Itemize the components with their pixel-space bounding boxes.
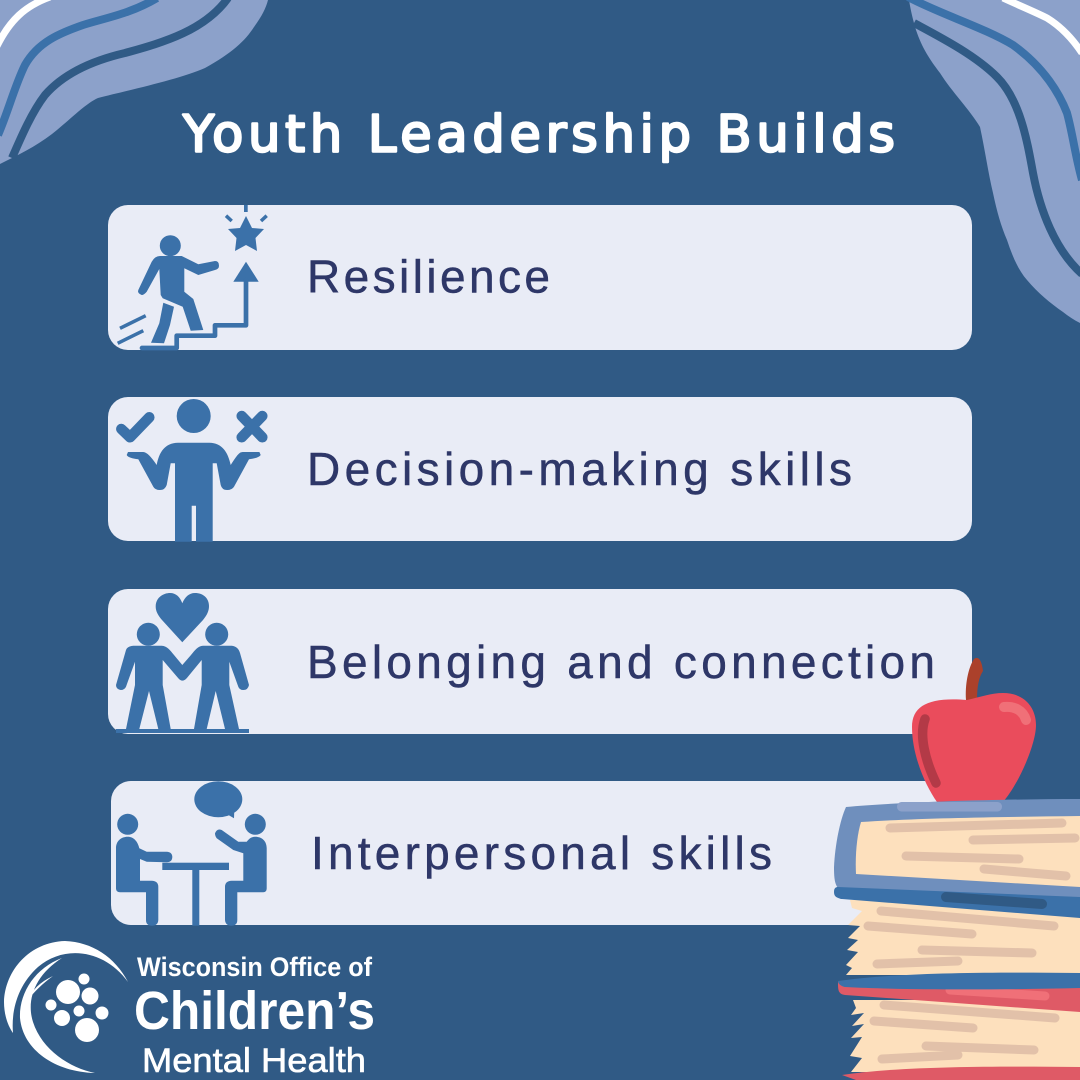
label: belonging and connection: Belonging and connection	[307, 636, 935, 688]
logo text: Mental Health	[142, 1042, 366, 1080]
label: interpersonal skills: Interpersonal skills	[311, 827, 772, 879]
decorative wave: top right	[908, 0, 1080, 323]
logo text	[134, 952, 375, 1080]
logo mark	[4, 941, 128, 1073]
logo: Wisconsin Office of Children's Mental Health	[4, 941, 375, 1080]
book 2 pages and cover	[838, 900, 1080, 989]
apple	[912, 658, 1036, 802]
logo text: Wisconsin Office of	[137, 952, 373, 982]
panel: decision-making skills	[108, 397, 972, 542]
logo text: Children’s	[134, 981, 375, 1041]
icon: two people talking at a table	[116, 781, 267, 926]
panel: resilience	[108, 205, 972, 350]
panel: belonging and connection	[108, 589, 972, 734]
decorative wave: top left	[0, 0, 268, 164]
panel: interpersonal skills	[111, 781, 991, 926]
illustration: apple on stack of books	[834, 658, 1080, 1080]
icon: person climbing stairs to star	[118, 205, 267, 348]
icon: two people holding hands with heart	[116, 593, 249, 733]
label: resilience: Resilience	[307, 250, 550, 302]
icon: person weighing check and cross	[121, 399, 262, 542]
title: Youth Leadership Builds	[182, 106, 895, 164]
label: decision-making skills: Decision-making skills	[307, 443, 852, 495]
book 1 cover and pages	[834, 799, 1080, 918]
book 3 pages and cover	[838, 980, 1080, 1080]
